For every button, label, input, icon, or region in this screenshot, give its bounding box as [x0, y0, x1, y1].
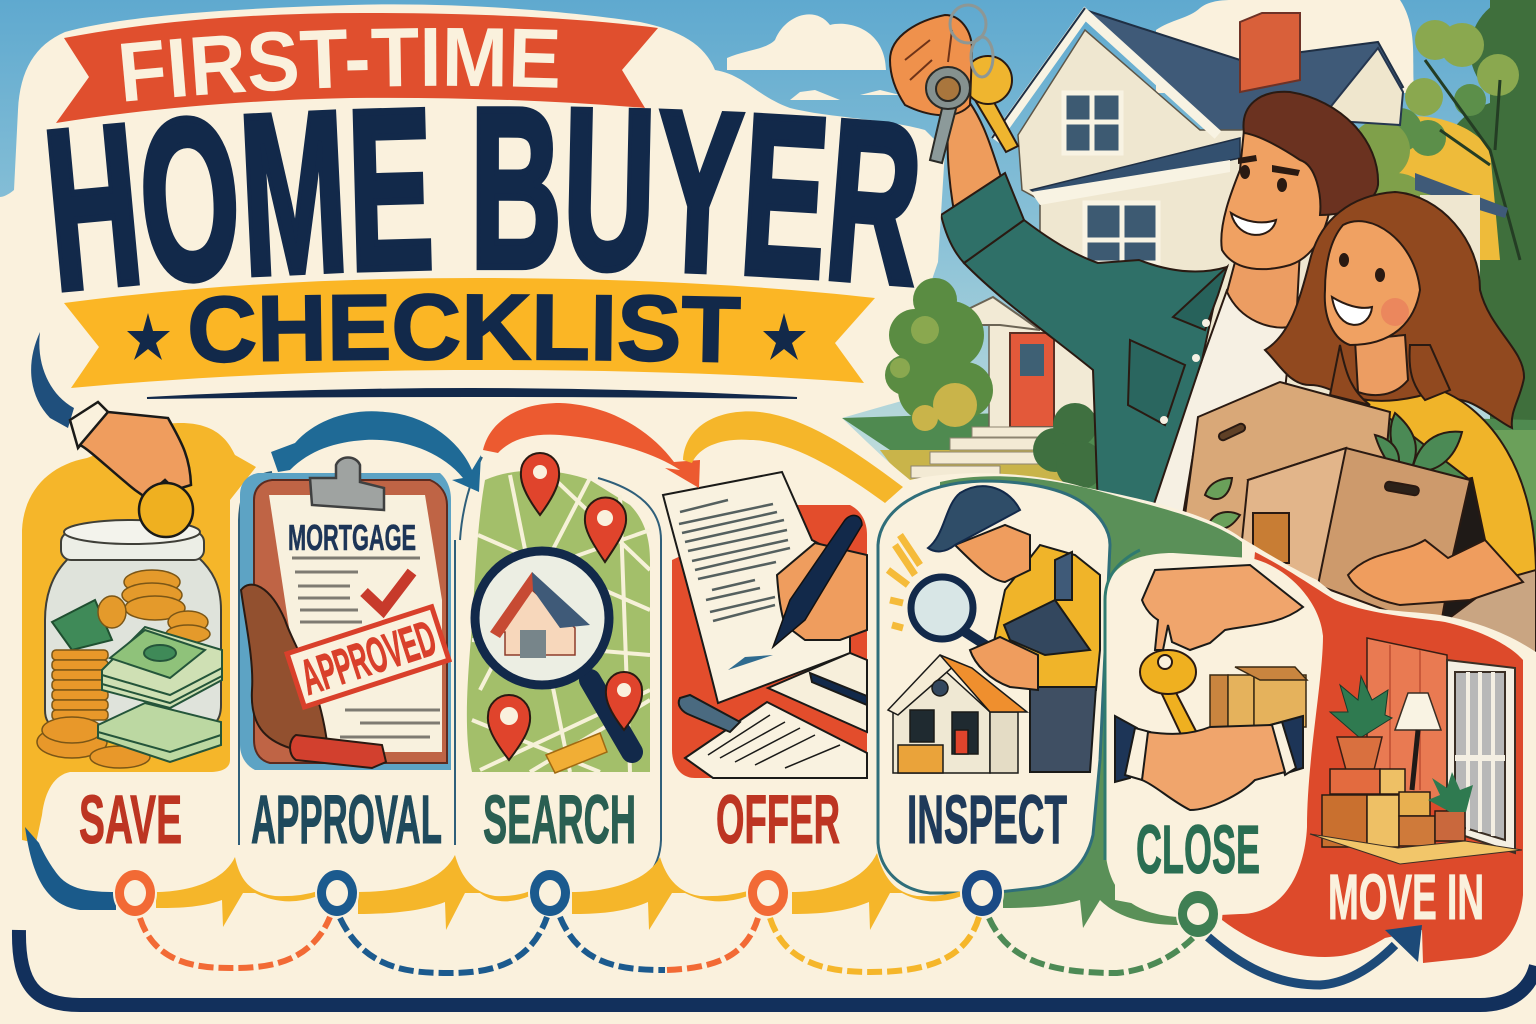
overalls [1004, 552, 1096, 772]
clipboard [254, 480, 447, 763]
side leaves [1205, 478, 1240, 529]
woman cheek [1381, 298, 1409, 326]
icon: right star [763, 313, 806, 360]
label: offer: OFFER [716, 781, 840, 858]
heading: home buyer: HOME BUYER [46, 106, 918, 293]
front bushes by porch [885, 278, 993, 431]
jar [45, 520, 221, 730]
magnifier [475, 551, 632, 752]
man eyes [1238, 155, 1300, 192]
jar coins [98, 570, 210, 643]
ribbon: checklist [64, 278, 875, 388]
card outline [239, 472, 455, 845]
yellow backdrop [22, 423, 256, 843]
clip [310, 458, 384, 510]
paper [269, 495, 442, 752]
woman smile [1332, 297, 1372, 325]
man face [1221, 124, 1332, 269]
blue backing [240, 473, 451, 770]
right wing roof [1415, 173, 1508, 218]
panel: search [460, 453, 661, 893]
stamp handle [290, 735, 386, 768]
woman top [1353, 390, 1536, 582]
card left line [1105, 550, 1140, 860]
fist fingers [905, 30, 952, 80]
clouds [727, 0, 1415, 100]
back box [1183, 382, 1390, 610]
floor [1310, 834, 1522, 864]
ribbon: checklist: CHECKLIST [190, 293, 742, 364]
back bush [1350, 120, 1473, 373]
panel: save [22, 402, 256, 858]
moving boxes [1322, 769, 1465, 847]
node: search [529, 869, 571, 917]
pin centres [500, 465, 631, 725]
bottom navy line [19, 930, 1536, 1005]
man [890, 5, 1378, 515]
tree dark mass [1440, 0, 1536, 440]
woman hair front wave [1330, 345, 1450, 405]
dormer window [1064, 93, 1121, 153]
card [1105, 553, 1323, 917]
gold key [964, 56, 1018, 152]
plant [1330, 676, 1392, 770]
chimney [1240, 13, 1300, 92]
handshake [1115, 716, 1303, 810]
woman eyes [1339, 253, 1385, 282]
room wall [1367, 638, 1447, 800]
woman neck [1355, 335, 1408, 395]
card outline [460, 457, 661, 893]
sky background [0, 0, 1536, 520]
worker cap [928, 486, 1020, 551]
right gable [1320, 48, 1403, 125]
woman hair [1265, 192, 1524, 428]
man hair [1243, 92, 1378, 215]
lower window [1085, 203, 1158, 263]
worker body [990, 545, 1100, 690]
contract lines [679, 500, 790, 621]
lawn [842, 410, 1536, 660]
man smile [1231, 213, 1276, 235]
jar bill [52, 600, 112, 650]
node: offer [747, 869, 789, 917]
coin stack [37, 650, 150, 768]
right porch bush [1033, 403, 1104, 489]
panel: close [1105, 550, 1323, 917]
marker [546, 733, 607, 773]
fist [890, 15, 972, 115]
panel: move in [1222, 552, 1523, 963]
dark gap [1440, 478, 1500, 625]
wall boards [1390, 645, 1420, 790]
map roads [472, 470, 650, 772]
dashed arcs [140, 917, 1193, 973]
panel: inspect [878, 481, 1110, 893]
arrow: approval swoop [271, 411, 481, 492]
couple illustration [890, 5, 1536, 665]
banner: first-time: FIRST-TIME [120, 28, 558, 102]
yellow tree [1390, 116, 1500, 260]
key giving hand [1142, 565, 1303, 650]
tree branches [1425, 60, 1520, 260]
red backdrop [672, 505, 867, 778]
small plant [1428, 772, 1473, 812]
jacket pocket [1128, 340, 1185, 425]
hand with coin [70, 402, 193, 537]
inspector hand [970, 637, 1038, 690]
green wave connector [940, 476, 1242, 928]
gold key [1140, 650, 1198, 745]
arrow: search swoop [483, 403, 700, 488]
door [1010, 333, 1054, 427]
neck [1227, 250, 1300, 328]
front box [1248, 448, 1470, 630]
worker face [955, 525, 1030, 582]
lamp [1395, 693, 1441, 790]
house in lens [497, 590, 575, 655]
node: save [114, 869, 156, 917]
yellow rays [888, 535, 920, 628]
steps [911, 427, 1056, 478]
back box handle [1218, 422, 1246, 442]
main roof [1085, 10, 1403, 160]
map pins [488, 453, 642, 760]
arrow: offer swoop [683, 411, 903, 503]
yellow progress arrows [156, 853, 962, 930]
small house [888, 655, 1027, 773]
key rings [950, 5, 993, 77]
mid tree clusters [1378, 84, 1486, 156]
label: approval: APPROVAL [251, 781, 442, 858]
lower roof [1031, 138, 1240, 200]
main wall [1018, 30, 1340, 400]
tree leaf clusters [1405, 20, 1519, 116]
jacket body and sleeve [964, 220, 1227, 510]
panel: approval [239, 458, 455, 858]
plant [1375, 413, 1462, 480]
tan bag [1430, 570, 1536, 665]
tee shirt [1150, 290, 1292, 515]
label: inspect: INSPECT [907, 781, 1067, 858]
gable trim [995, 14, 1218, 140]
title block [46, 13, 918, 399]
arrow: to move in [1208, 925, 1422, 985]
mitt hand [241, 585, 328, 750]
porch [989, 323, 1097, 429]
red background [1222, 552, 1523, 963]
door [1447, 660, 1515, 853]
panel: offer [663, 472, 867, 858]
document lines [292, 558, 440, 737]
icon: left star [127, 313, 170, 360]
label: search: SEARCH [483, 781, 636, 858]
label: save: SAVE [79, 781, 182, 858]
pen on desk [679, 695, 740, 732]
front box handle [1384, 481, 1419, 496]
keys overlay [926, 67, 970, 163]
woman [1265, 192, 1536, 582]
cuff [941, 173, 1024, 263]
card [878, 481, 1110, 893]
house illustration [842, 0, 1536, 660]
jacket buttons [1160, 319, 1210, 424]
inspector magnifier [911, 577, 990, 648]
node: close [1177, 890, 1219, 938]
blue curve start [25, 827, 116, 910]
forearm [948, 103, 1005, 232]
node: approval [316, 869, 358, 917]
lower documents [685, 653, 867, 778]
approved stamp: APPROVED [294, 610, 443, 706]
label: close: CLOSE [1136, 811, 1260, 888]
mortgage text: MORTGAGE [288, 517, 416, 558]
small orange box [1253, 513, 1289, 563]
writing hand [777, 543, 867, 640]
map [467, 471, 650, 772]
woman arm and hand [1348, 540, 1523, 605]
collar [1173, 267, 1227, 330]
contract paper [663, 472, 850, 703]
approved stamp [287, 607, 449, 708]
node: inspect [961, 869, 1003, 917]
signature mark [728, 655, 773, 670]
timeline nodes [114, 869, 1219, 938]
boxes [1210, 667, 1307, 727]
woman face [1325, 221, 1420, 345]
timeline [19, 827, 1536, 1005]
cash stacks [98, 627, 222, 762]
underline swoosh [147, 389, 797, 398]
pen [773, 515, 862, 647]
left navy swoosh [31, 332, 74, 428]
checkmark [364, 572, 412, 610]
